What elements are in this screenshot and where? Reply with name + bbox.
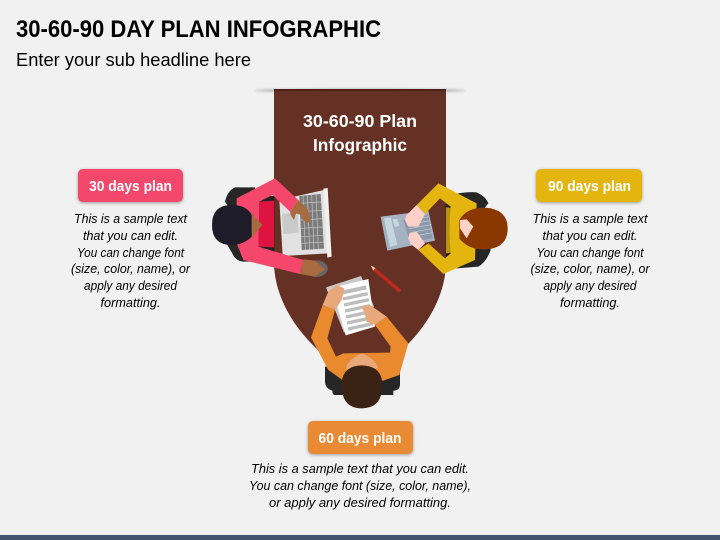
text: 90 days: formatting. [560, 296, 620, 310]
badge: 60 days plan: 60 days plan [318, 431, 402, 447]
badge: 30 days plan [78, 169, 183, 203]
title: 30-60-90 DAY PLAN INFOGRAPHIC [16, 16, 381, 43]
text: 60 days [249, 462, 471, 510]
table [254, 89, 466, 358]
subtitle: Enter your sub headline here [16, 49, 251, 70]
text: 60 days: This is a sample text that you can edit. [251, 462, 469, 476]
text: 60 days: or apply any desired formatting. [269, 496, 451, 510]
badge: 90 days plan [536, 169, 642, 203]
person: right with tablet [381, 183, 508, 274]
badge: 30 days plan: 30 days plan [89, 179, 172, 195]
text: 30 days: (size, color, name), or [71, 262, 191, 276]
text: 90 days [530, 212, 650, 310]
table heading: 30-60-90 Plan [303, 111, 417, 131]
text: 30 days: apply any desired [84, 279, 178, 293]
text: 30 days [71, 212, 191, 310]
text: 60 days: You can change font (size, color, name), [249, 479, 471, 493]
text: 90 days: (size, color, name), or [530, 262, 650, 276]
text: 90 days: apply any desired [544, 279, 637, 293]
text: 90 days: This is a sample text [532, 212, 648, 226]
person: left with laptop [212, 178, 332, 277]
table heading: Infographic [313, 135, 407, 155]
text: 30 days: formatting. [100, 296, 160, 310]
badge: 90 days plan: 90 days plan [548, 179, 631, 195]
text: 30 days: You can change font [77, 246, 184, 260]
pencil [371, 265, 401, 293]
text: 30 days: This is a sample text [74, 212, 188, 226]
badge: 60 days plan [308, 421, 413, 455]
text: 90 days: that you can edit. [542, 229, 638, 243]
text: 90 days: You can change font [536, 246, 644, 260]
table heading [303, 111, 417, 155]
person: bottom with papers [311, 276, 408, 408]
text: 30 days: that you can edit. [83, 229, 178, 243]
bottom bar [0, 535, 720, 540]
